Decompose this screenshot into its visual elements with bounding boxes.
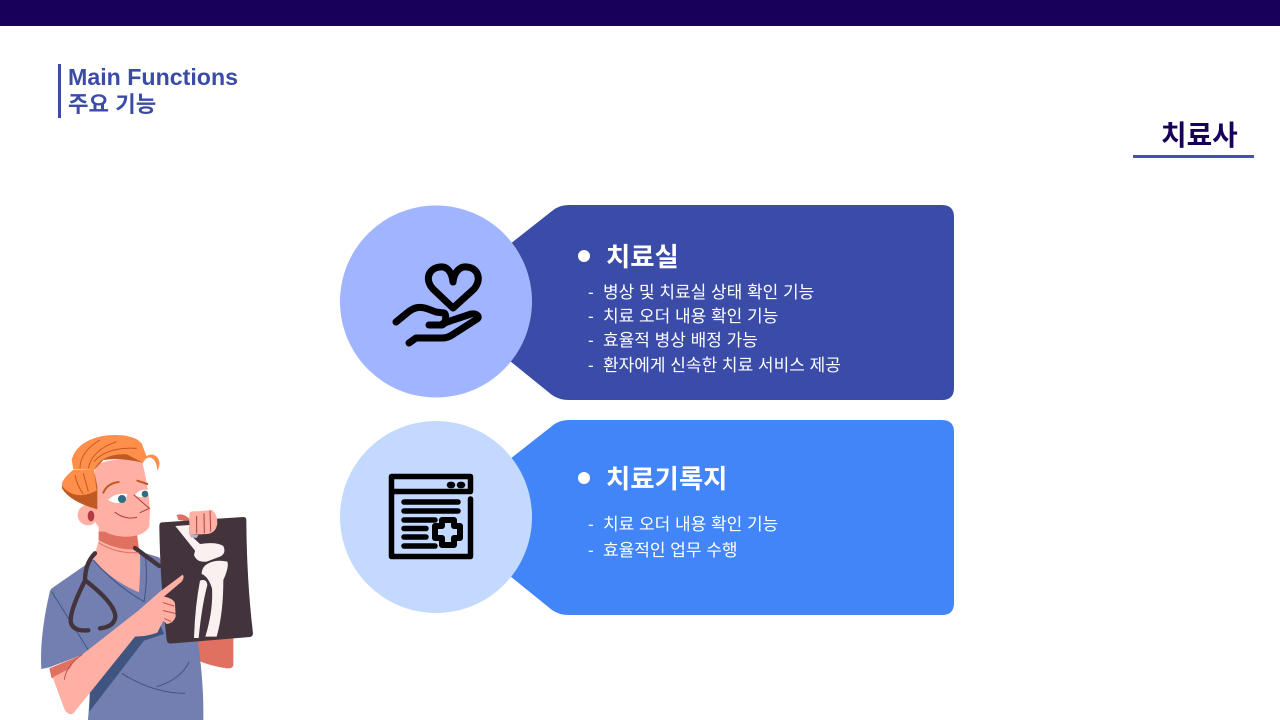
list item: 치료 오더 내용 확인 기능 bbox=[603, 307, 778, 326]
eyes bbox=[108, 490, 149, 503]
shirt bbox=[41, 552, 203, 720]
panel heading: 치료기록지 bbox=[606, 464, 727, 494]
x-ray film bbox=[159, 517, 253, 644]
hair curl bbox=[141, 455, 160, 471]
neck shadow bbox=[99, 532, 139, 549]
panel: treatment records bbox=[340, 420, 954, 615]
neck bbox=[93, 527, 140, 592]
neck lines bbox=[99, 543, 139, 553]
hair back bbox=[62, 470, 97, 509]
back arm bbox=[197, 637, 233, 668]
list item: 병상 및 치료실 상태 확인 기능 bbox=[603, 283, 814, 302]
list item: - bbox=[588, 541, 594, 560]
list item: - bbox=[588, 283, 594, 302]
section heading bbox=[58, 64, 238, 118]
finger lines bbox=[64, 603, 175, 679]
heading accent bar bbox=[58, 64, 61, 118]
top banner bbox=[0, 0, 1280, 26]
list item: - bbox=[588, 515, 594, 534]
ear bbox=[78, 505, 98, 525]
list item: 환자에게 신속한 치료 서비스 제공 bbox=[603, 356, 841, 375]
role name: 치료사 bbox=[1161, 120, 1238, 151]
list item: 치료 오더 내용 확인 기능 bbox=[603, 515, 778, 534]
forearm and pointing hand bbox=[53, 575, 184, 714]
sleeve shadow bbox=[49, 655, 82, 678]
hair top bbox=[72, 435, 147, 470]
arm shadow bbox=[89, 624, 164, 712]
list item: 효율적 병상 배정 가능 bbox=[603, 331, 758, 350]
panel heading: 치료실 bbox=[606, 242, 679, 272]
role label bbox=[1133, 120, 1254, 158]
panel shape and circle bbox=[340, 205, 954, 400]
list item: 효율적인 업무 수행 bbox=[603, 541, 738, 560]
list item: - bbox=[588, 331, 594, 350]
list item: - bbox=[588, 307, 594, 326]
hair strands bbox=[75, 440, 137, 494]
list item: - bbox=[588, 356, 594, 375]
role underline bbox=[1133, 155, 1254, 158]
shirt fold bbox=[52, 592, 189, 693]
nose and mouth bbox=[115, 495, 149, 518]
heading english: Main Functions bbox=[68, 64, 238, 90]
stethoscope bbox=[71, 548, 159, 630]
fingers behind x-ray bbox=[177, 514, 190, 522]
bones bbox=[175, 525, 228, 638]
hair underside bbox=[94, 454, 143, 470]
illustration: therapist holding x-ray bbox=[41, 435, 253, 720]
panel shape, circle and icon bbox=[340, 420, 954, 615]
hair bun bbox=[62, 470, 97, 495]
panel: treatment room bbox=[340, 205, 954, 400]
collar bbox=[93, 553, 146, 602]
heading korean: 주요 기능 bbox=[68, 92, 156, 117]
face bbox=[95, 460, 150, 537]
eyebrows bbox=[103, 481, 147, 493]
holding hand bbox=[189, 510, 217, 535]
